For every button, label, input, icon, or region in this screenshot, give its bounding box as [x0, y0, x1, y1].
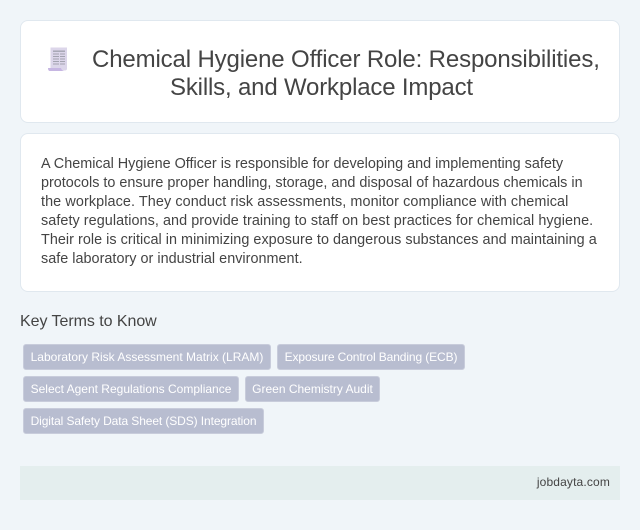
tag: green chemistry: Green Chemistry Audit	[252, 382, 373, 396]
footer source text: jobdayta.com	[537, 475, 610, 489]
tag: SDS: Digital Safety Data Sheet (SDS) Integration	[31, 414, 256, 428]
description text: Their role is critical in minimizing exposure to dangerous substances and maintaining a	[41, 232, 597, 248]
key term tags	[23, 344, 465, 434]
tag: select agent	[23, 376, 239, 402]
tag: SDS	[23, 408, 264, 434]
panel: title header	[20, 20, 620, 123]
description text: the workplace. They conduct risk assessments, monitor compliance with chemical	[41, 194, 568, 210]
tag: LRAM	[23, 344, 271, 370]
description text: safe laboratory or industrial environment.	[41, 251, 303, 267]
icon: document	[48, 48, 67, 71]
description text: A Chemical Hygiene Officer is responsible for developing and implementing safety	[41, 156, 563, 172]
tag: green chemistry	[245, 376, 380, 402]
heading: key terms: Key Terms to Know	[20, 313, 157, 330]
title line 1: Chemical Hygiene Officer Role: Responsibilities,	[92, 46, 600, 73]
tag: select agent: Select Agent Regulations Compliance	[31, 382, 231, 396]
panel: description	[20, 133, 620, 292]
tag: ECB: Exposure Control Banding (ECB)	[285, 350, 457, 364]
description text: safety regulations, and provide training to staff on best practices for chemical hygiene.	[41, 213, 593, 229]
description text: protocols to ensure proper handling, storage, and disposal of hazardous chemicals in	[41, 175, 583, 191]
footer bar	[20, 466, 620, 500]
tag: LRAM: Laboratory Risk Assessment Matrix (LRAM)	[31, 350, 263, 364]
description text	[41, 156, 597, 267]
tag: ECB	[277, 344, 465, 370]
title line 2: Skills, and Workplace Impact	[170, 74, 473, 101]
